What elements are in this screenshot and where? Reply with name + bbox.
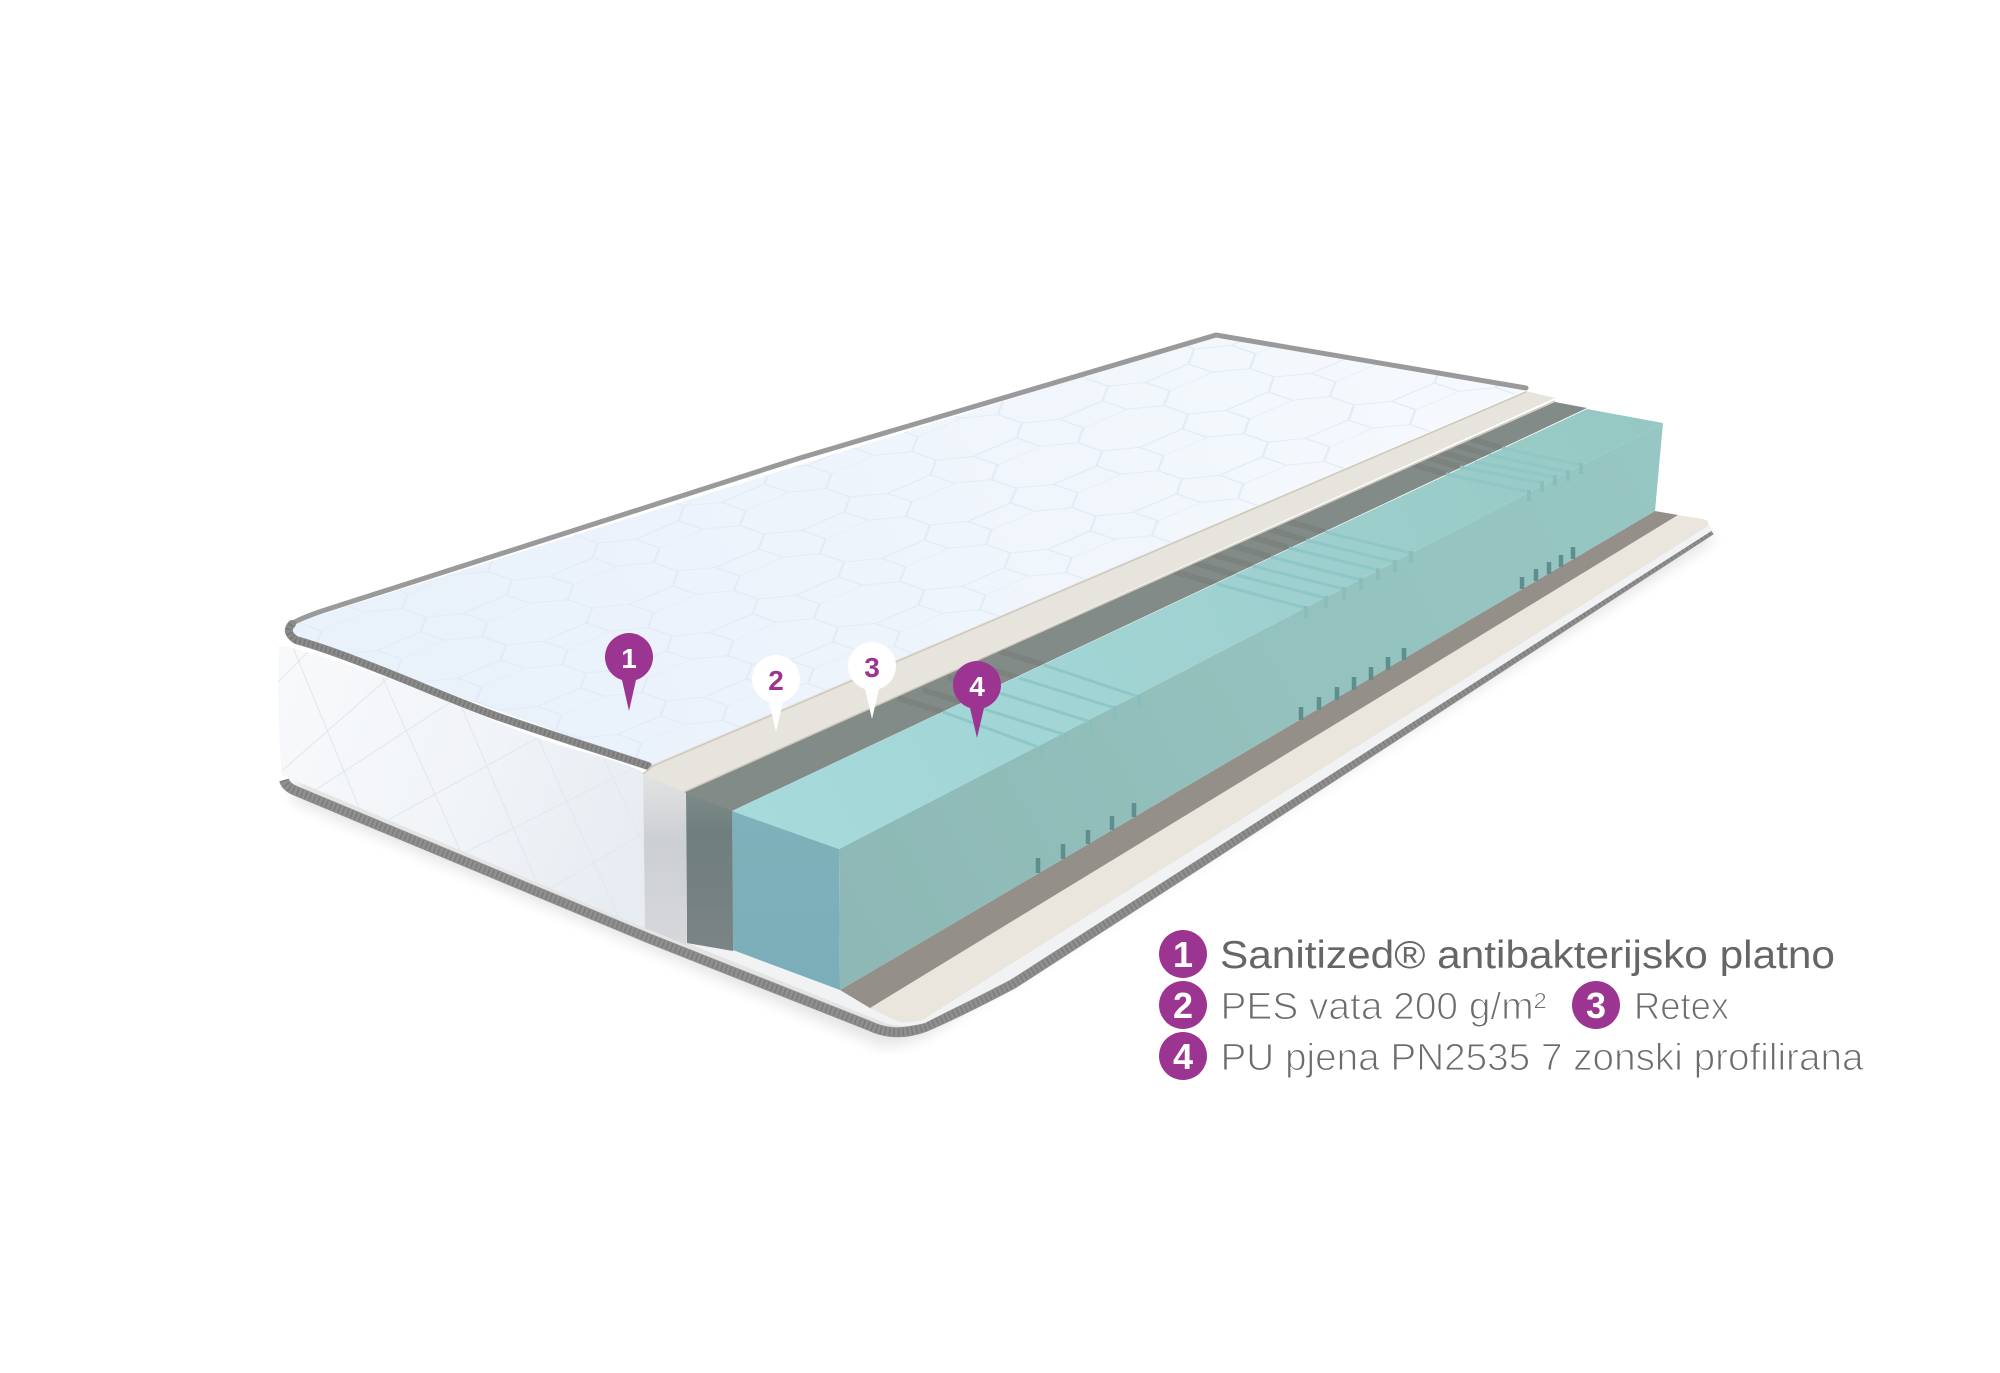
legend item 2: 2 [1173, 985, 1193, 1026]
ground shadow [290, 530, 1716, 1046]
foam block top face [732, 409, 1663, 849]
top piping [289, 335, 1526, 766]
layer 3 top: Retex [684, 402, 1587, 811]
retex groove shadows [898, 435, 1502, 712]
legend item 2: PES vata 200 g/m² [1220, 986, 1546, 1028]
pin 2 [752, 655, 800, 732]
pin 1 [605, 633, 653, 711]
foam groove notches, upper edge [1041, 463, 1581, 760]
mattress illustration [260, 335, 1716, 1046]
quilted side cover [278, 648, 645, 928]
legend item 3: Retex [1634, 986, 1729, 1028]
cream layer edge lines [643, 392, 1555, 792]
legend [1159, 930, 1864, 1080]
quilted top surface [288, 335, 1526, 766]
foam profile grooves, top [943, 448, 1581, 748]
pin 3: 3 [864, 652, 880, 683]
legend item 4: PU pjena PN2535 7 zonski profilirana [1220, 1037, 1864, 1079]
legend item 3 [1572, 981, 1729, 1029]
layer 2 front: PES wadding [643, 773, 686, 945]
bottom cream layer [870, 515, 1708, 1022]
bottom grey layer [840, 511, 1678, 1008]
pin 1: 1 [621, 643, 637, 674]
bottom sheet [645, 525, 1713, 1026]
foam groove notches, lower edge [1038, 547, 1573, 873]
pin 4: 4 [969, 671, 985, 702]
legend item 1: 1 [1173, 934, 1193, 975]
pin 2: 2 [768, 665, 784, 696]
legend item 4: 4 [1173, 1036, 1193, 1077]
pin 3 [848, 642, 896, 719]
legend item 1: Sanitized® antibakterijsko platno [1220, 934, 1835, 977]
layer 2 top: PES wadding [643, 391, 1555, 792]
foam block side face [839, 423, 1663, 990]
foam block front face [732, 811, 840, 990]
bottom piping [284, 530, 1711, 1032]
legend item 3: 3 [1586, 985, 1606, 1026]
layer 3 front: Retex [686, 792, 733, 951]
pin 4 [953, 661, 1001, 738]
